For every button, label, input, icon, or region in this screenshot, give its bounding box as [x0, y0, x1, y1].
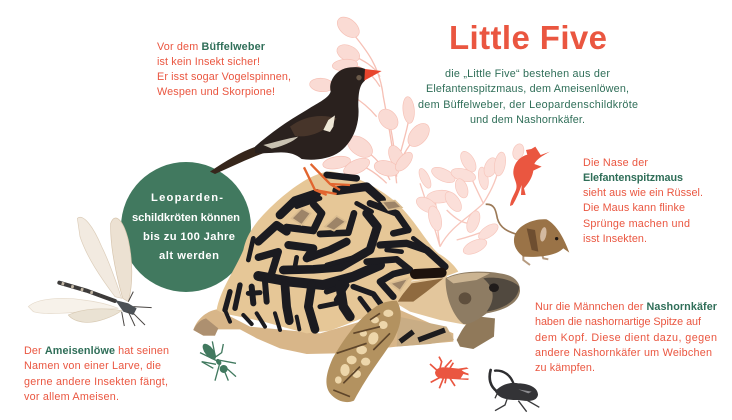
text: Büffelweber: Er isst sogar Vogelspinnen, [157, 71, 291, 83]
text: Büffelweber: ist kein Insekt sicher! [157, 56, 260, 68]
bird photo illustration [210, 67, 382, 195]
text: Elefantenspitzmaus [583, 157, 703, 245]
stag beetle icon [430, 357, 469, 388]
shrew body [514, 219, 569, 257]
beetle legs [495, 393, 539, 412]
text: Büffelweber [157, 41, 291, 98]
text: Büffelweber: Wespen und Skorpione! [157, 86, 275, 98]
text: Nashornkäfer: dem Kopf. Diese dient dazu, gegen [535, 332, 717, 344]
intro text block [418, 68, 638, 126]
antlion legs [122, 292, 152, 326]
intro text block: Elefantenspitzmaus, dem Ameisenlöwen, [426, 83, 629, 95]
panel: green circle callout [121, 162, 251, 292]
text: Nashornkäfer: haben die nashornartige Spitze auf [535, 316, 702, 328]
text: Nashornkäfer: zu kämpfen. [535, 362, 595, 374]
text: Nashornkäfer: Nur die Männchen der Nashornkäfer [535, 301, 718, 313]
panel: green circle callout: Leoparden- [151, 192, 223, 204]
text: Ameisenlöwe: gerne andere Insekten fängt, [24, 376, 168, 388]
text: Ameisenlöwe [24, 345, 169, 403]
text: Elefantenspitzmaus: Die Maus kann flinke [583, 202, 685, 214]
panel: green circle callout: bis zu 100 Jahre [143, 231, 235, 243]
beetle horns [490, 370, 497, 392]
antlion photo illustration [28, 217, 152, 326]
shrew legs [523, 252, 548, 265]
elephant shrew photo illustration [486, 204, 569, 265]
bird body [255, 67, 366, 160]
shrew tail [486, 204, 517, 234]
title: Little Five [449, 19, 607, 56]
tortoise rear foot [193, 318, 218, 336]
elephant shrew silhouette icon [510, 147, 550, 206]
ant icon [200, 341, 236, 381]
text: Elefantenspitzmaus: sieht aus wie ein Rüssel. [583, 187, 703, 199]
shell scute markings [292, 201, 408, 291]
rhinoceros beetle photo illustration [490, 370, 539, 412]
text: Ameisenlöwe: vor allem Ameisen. [24, 391, 119, 403]
bird beak [364, 69, 382, 81]
text: Elefantenspitzmaus: isst Insekten. [583, 233, 647, 245]
tortoise shell [217, 171, 458, 333]
text: Ameisenlöwe: Der Ameisenlöwe hat seinen [24, 345, 169, 357]
text: Nashornkäfer [535, 301, 718, 374]
text: Elefantenspitzmaus: Sprünge machen und [583, 218, 690, 230]
panel: green circle callout: alt werden [159, 250, 219, 262]
tortoise photo illustration [193, 171, 520, 402]
bird tail [210, 146, 265, 174]
antlion wings [77, 217, 122, 298]
panel: green circle callout: schildkröten können [132, 212, 240, 224]
tortoise belly plate [397, 317, 454, 347]
intro text block: dem Büffelweber, der Leopardenschildkröte [418, 99, 638, 111]
bird legs [304, 164, 350, 195]
text: Nashornkäfer: andere Nashornkäfer um Weibchen [535, 347, 712, 359]
tortoise head [446, 272, 520, 324]
text: Elefantenspitzmaus: Die Nase der [583, 157, 648, 169]
text: Büffelweber: Vor dem Büffelweber [157, 41, 266, 53]
shell black pattern [225, 175, 445, 330]
tortoise far foot [457, 317, 495, 349]
tortoise neck [393, 276, 473, 325]
plant illustration: right grass [414, 143, 526, 257]
tortoise rear leg and underside [193, 309, 453, 354]
tortoise front leg [326, 301, 401, 402]
intro text block: die „Little Five“ bestehen aus der [445, 68, 610, 80]
text: Elefantenspitzmaus: Elefantenspitzmaus [583, 172, 683, 184]
bird wing [290, 116, 337, 136]
intro text block: und dem Nashornkäfer. [470, 114, 585, 126]
plant illustration: upper grass [309, 13, 434, 183]
text: Ameisenlöwe: Namen von einer Larve, die [24, 360, 161, 372]
antlion body [59, 283, 115, 301]
beetle body [495, 383, 538, 401]
